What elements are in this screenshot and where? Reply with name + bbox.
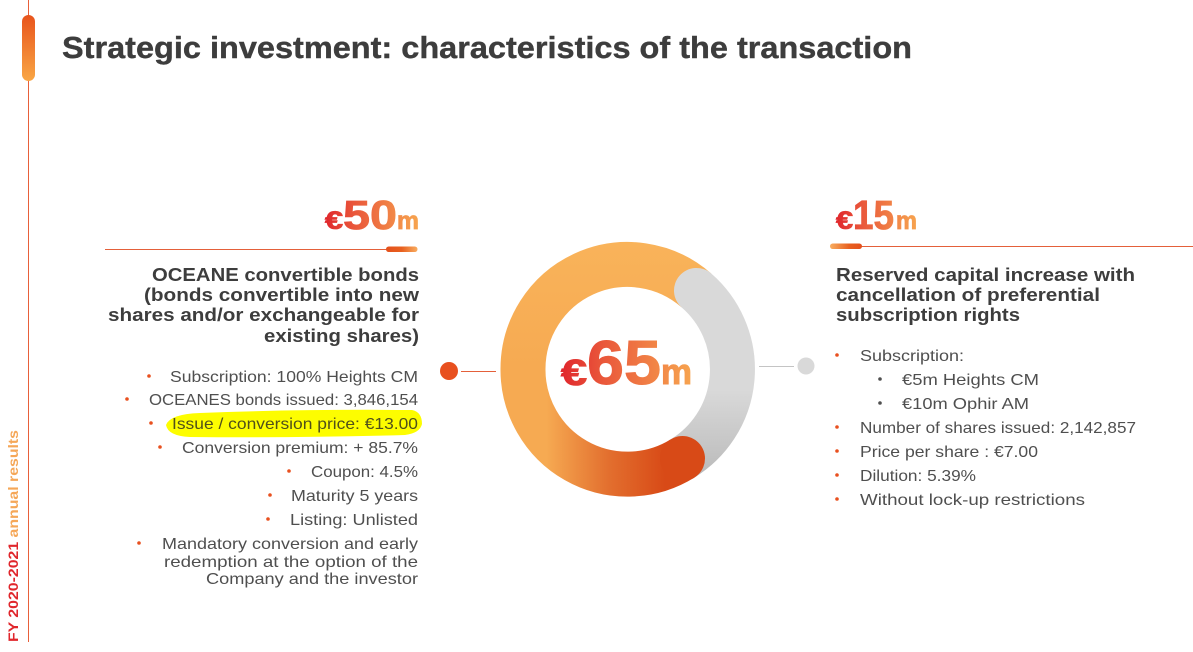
centre amount: €65m — [561, 329, 692, 398]
list: share terms: Price per share : €7.00 — [860, 444, 1038, 461]
centre amount: €65m: € — [561, 352, 587, 393]
list bullets — [835, 353, 882, 501]
amount: €50m: 50 — [343, 192, 397, 238]
connector: right — [759, 358, 814, 374]
amount: €15m — [836, 192, 917, 238]
amount: €50m: m — [397, 207, 419, 235]
list: bond terms: Mandatory conversion and early — [162, 536, 418, 553]
ring segment: €50m lower — [523, 368, 682, 474]
heading: reserved capital increase — [836, 264, 1135, 325]
list: share terms: Number of shares issued: 2,142,857 — [860, 420, 1136, 437]
list: share terms: Dilution: 5.39% — [860, 468, 976, 485]
title: Strategic investment: characteristics of the transaction — [62, 30, 912, 65]
list: bond terms: OCEANES bonds issued: 3,846,154 — [149, 392, 418, 409]
list: bond terms: Coupon: 4.5% — [311, 464, 418, 481]
centre amount: €65m: 65 — [587, 329, 661, 398]
divider with accent — [105, 246, 418, 252]
list: bond terms: Conversion premium: + 85.7% — [182, 440, 418, 457]
list: bond terms: Subscription: 100% Heights CM — [170, 369, 418, 386]
connector: left — [440, 362, 496, 380]
heading: reserved capital increase: subscription rights — [836, 304, 1020, 325]
donut chart: €65m — [440, 264, 814, 481]
sidebar rule with pill marker — [22, 0, 35, 642]
ring segment end cap — [660, 436, 705, 481]
panel: €15m reserved capital increase — [830, 192, 1193, 509]
heading: OCEANE convertible bonds: shares and/or exchangeable for — [108, 304, 419, 325]
centre amount: €65m: m — [661, 351, 692, 392]
list: bond terms: Maturity 5 years — [291, 488, 418, 505]
amount: €15m: € — [836, 207, 853, 235]
divider with accent — [830, 244, 1193, 249]
heading: OCEANE convertible bonds: existing shares) — [264, 325, 419, 346]
list: share terms: €5m Heights CM — [902, 372, 1039, 389]
ring segment: €15m — [682, 290, 732, 458]
list bullets — [125, 374, 291, 545]
amount: €15m: 15 — [853, 192, 894, 238]
list: share terms: €10m Ophir AM — [902, 396, 1029, 413]
heading: reserved capital increase: cancellation of preferential — [836, 284, 1100, 305]
list: bond terms: Issue / conversion price: €13.00 — [172, 416, 418, 433]
list: share terms — [860, 348, 1136, 509]
panel: €50m OCEANE convertible bonds — [105, 192, 422, 588]
heading: OCEANE convertible bonds: OCEANE convertible bonds — [152, 264, 419, 285]
list: share terms: Subscription: — [860, 348, 964, 365]
ring segment: €50m upper — [523, 264, 696, 370]
heading: OCEANE convertible bonds — [108, 264, 420, 346]
heading: reserved capital increase: Reserved capital increase with — [836, 264, 1135, 285]
sidebar label: FY 2020-2021 annual results: FY 2020-2021 annual results — [6, 430, 21, 642]
list: bond terms: Company and the investor — [206, 571, 419, 588]
list: bond terms: redemption at the option of the — [164, 554, 418, 571]
amount: €15m: m — [896, 207, 917, 235]
amount: €50m — [325, 192, 419, 238]
amount: €50m: € — [325, 207, 343, 235]
heading: OCEANE convertible bonds: (bonds convertible into new — [144, 284, 420, 305]
list: share terms: Without lock-up restrictions — [860, 492, 1085, 509]
highlight: issue price — [166, 410, 422, 437]
list: bond terms — [149, 369, 419, 588]
list: bond terms: Listing: Unlisted — [290, 512, 418, 529]
